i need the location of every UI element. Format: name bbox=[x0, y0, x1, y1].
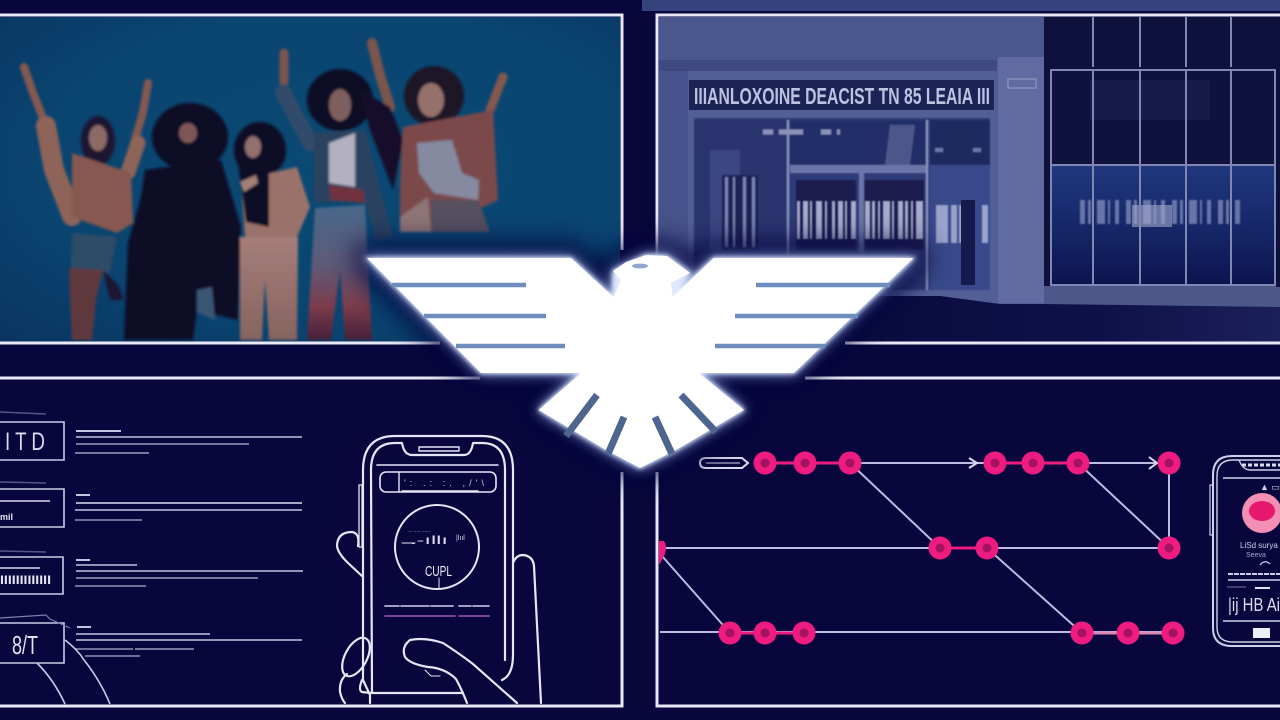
tail feathers bbox=[566, 395, 716, 454]
panel: feature list wireframe bbox=[0, 412, 303, 704]
phone outline bbox=[1213, 456, 1280, 646]
wing feathers bbox=[392, 285, 890, 346]
status icon: ▲ ▭ bbox=[1260, 482, 1280, 492]
text lines 3 bbox=[75, 560, 303, 586]
pink links bbox=[730, 463, 1173, 633]
box 1: I T D bbox=[5, 428, 45, 456]
nodes row one bbox=[754, 452, 1180, 474]
caret bbox=[1260, 562, 1270, 565]
bottom button bbox=[1253, 628, 1270, 638]
phone: profile screen: Seeva bbox=[1246, 552, 1266, 559]
box 4: 8/T bbox=[12, 630, 38, 660]
info lines bbox=[1228, 573, 1280, 575]
profile text: LiSd surya bbox=[1240, 541, 1278, 550]
side button bbox=[359, 485, 362, 547]
shop window interior bbox=[694, 118, 990, 290]
pillar bbox=[998, 57, 1044, 303]
left column bbox=[659, 71, 688, 296]
emblem: eagle bbox=[367, 255, 914, 468]
small plaque bbox=[1008, 79, 1036, 88]
dark halo bbox=[367, 255, 914, 468]
palm and thumb side bbox=[337, 532, 362, 576]
base ledge bbox=[1044, 286, 1280, 307]
thumb bbox=[404, 639, 517, 703]
photo backdrop bbox=[0, 17, 620, 342]
eagle body bbox=[367, 255, 914, 468]
box 1 bbox=[0, 412, 64, 460]
right fingers bbox=[513, 555, 541, 703]
eye bbox=[632, 264, 648, 268]
box 2 bbox=[0, 482, 64, 527]
panel: group photo bbox=[0, 17, 620, 342]
side button bbox=[1210, 485, 1213, 535]
dial circle: |lııl bbox=[456, 535, 465, 542]
hand curves bbox=[37, 640, 110, 704]
dancer two bbox=[124, 103, 241, 340]
tap mark bbox=[425, 670, 440, 676]
phone body bbox=[363, 436, 513, 703]
dark tower bbox=[1044, 17, 1280, 287]
pavement bbox=[659, 296, 1280, 342]
tower upper mullions bbox=[1093, 17, 1231, 67]
bottom edge bbox=[372, 692, 463, 694]
dial circle bbox=[395, 505, 479, 589]
cornice bbox=[659, 60, 997, 71]
fingers bbox=[336, 633, 376, 681]
header line bbox=[377, 464, 498, 466]
phone: profile screen bbox=[1210, 456, 1280, 646]
text lines 1 bbox=[75, 431, 302, 453]
top strip above store panel bbox=[642, 0, 1280, 11]
dancer one bbox=[24, 67, 148, 340]
dancer four bbox=[283, 43, 403, 340]
phone inner screen bbox=[371, 443, 505, 693]
long dress bbox=[961, 200, 975, 285]
search bar bbox=[380, 472, 496, 492]
search bar: ': .: :. ,/'\ bbox=[404, 478, 484, 488]
upper wall bbox=[659, 17, 1044, 67]
sign board: IIIANLOXOINE DEACIST TN 85 LEAIA III bbox=[694, 83, 990, 109]
clothes rack in door bbox=[797, 220, 988, 224]
avatar circle bbox=[1242, 493, 1280, 533]
sign board bbox=[689, 80, 994, 110]
box 3: IIIIIIIIIIIII bbox=[0, 573, 51, 587]
dial circle: .-ıllı bbox=[410, 533, 448, 547]
chevron arrows bbox=[969, 457, 1157, 469]
box 3 bbox=[0, 551, 63, 594]
tower right edge bbox=[1276, 17, 1280, 287]
panel: storefront photo bbox=[659, 17, 1280, 342]
dial circle: CUPL bbox=[425, 563, 452, 580]
dancer three bbox=[234, 122, 310, 340]
dancer five bbox=[400, 66, 503, 232]
notch bbox=[1239, 460, 1280, 470]
text lines 2 bbox=[75, 495, 302, 520]
outer glow bbox=[367, 255, 914, 468]
dial circle: ... ..... ...... bbox=[408, 528, 430, 534]
panel: journey flow diagram bbox=[659, 452, 1184, 644]
speaker bbox=[419, 447, 459, 451]
tower window bbox=[1050, 70, 1275, 285]
nodes row three bbox=[718, 622, 1184, 644]
connectors bbox=[660, 463, 1173, 633]
text lines 4 bbox=[75, 627, 302, 656]
inner glow bbox=[367, 255, 914, 468]
inner outline bbox=[1217, 460, 1280, 642]
pink text rows bbox=[385, 606, 489, 616]
nodes row two bbox=[659, 536, 1180, 565]
phone illustration with hand bbox=[336, 436, 541, 703]
box 2: mil bbox=[0, 512, 13, 522]
dancers bbox=[24, 43, 503, 340]
box 4 bbox=[0, 615, 70, 663]
storefront facade bbox=[659, 60, 1044, 304]
start arrow bbox=[700, 458, 748, 468]
